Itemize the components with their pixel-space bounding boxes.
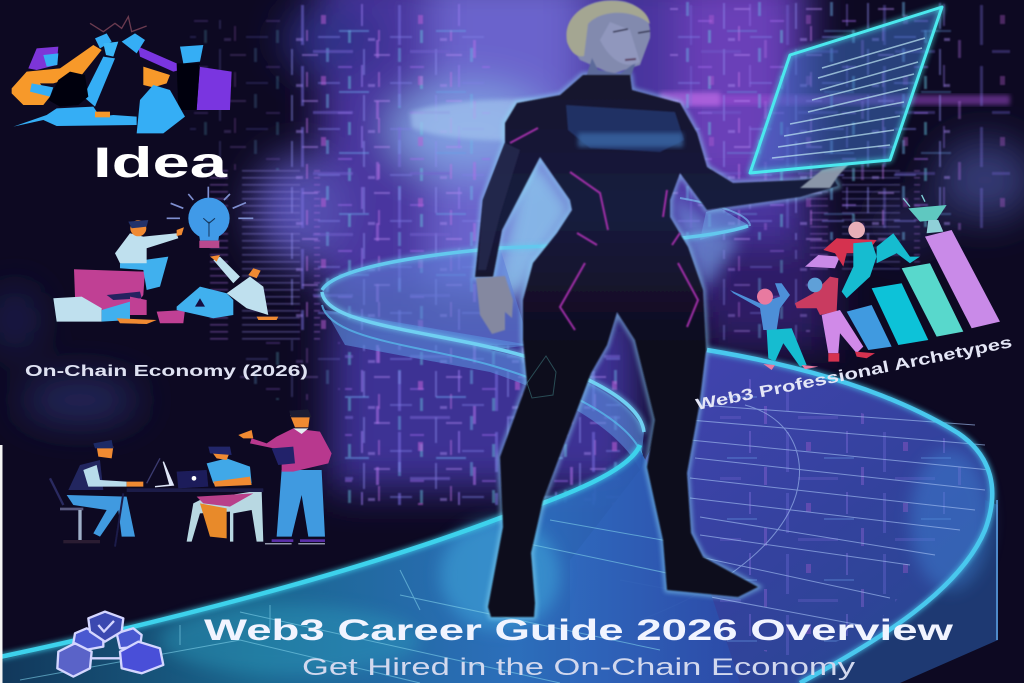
- heading: Idea: Idea: [93, 139, 229, 187]
- illustration: team high five: [12, 17, 232, 133]
- chest panel: [566, 105, 684, 152]
- label: Web3 Professional Archetypes: Web3 Professional Archetypes: [694, 334, 1014, 414]
- illustration: team at table: [50, 409, 332, 547]
- right hand: [800, 163, 850, 188]
- holographic data panel: [750, 7, 942, 173]
- title: Web3 Career Guide 2026 Overview: Web3 Career Guide 2026 Overview: [204, 614, 954, 647]
- illustration: lightbulb brainstorm: [53, 187, 278, 324]
- light behind torso: [495, 160, 575, 300]
- heading: On-Chain Economy (2026): On-Chain Economy (2026): [25, 363, 308, 380]
- left hand: [476, 276, 513, 334]
- illustration: archetypes climbing growth chart: [730, 195, 1000, 370]
- spiral path: upper loop ribbons: [322, 99, 750, 470]
- matrix code rain: [190, 0, 1010, 505]
- icon: blockchain shield cubes: [57, 612, 163, 677]
- outer glow of figure: [475, 75, 838, 617]
- magenta suit accents: [510, 128, 698, 330]
- body suit: [475, 75, 838, 617]
- subtitle: Get Hired in the On-Chain Economy: Get Hired in the On-Chain Economy: [302, 654, 855, 681]
- spiral path: lower left floor and rail: [0, 445, 740, 683]
- white edge strip: [0, 445, 2, 683]
- spiral path: right floor: [570, 350, 998, 683]
- horizontal magenta light streak: [690, 95, 1010, 105]
- head: [566, 0, 650, 84]
- woman figure: [475, 0, 850, 617]
